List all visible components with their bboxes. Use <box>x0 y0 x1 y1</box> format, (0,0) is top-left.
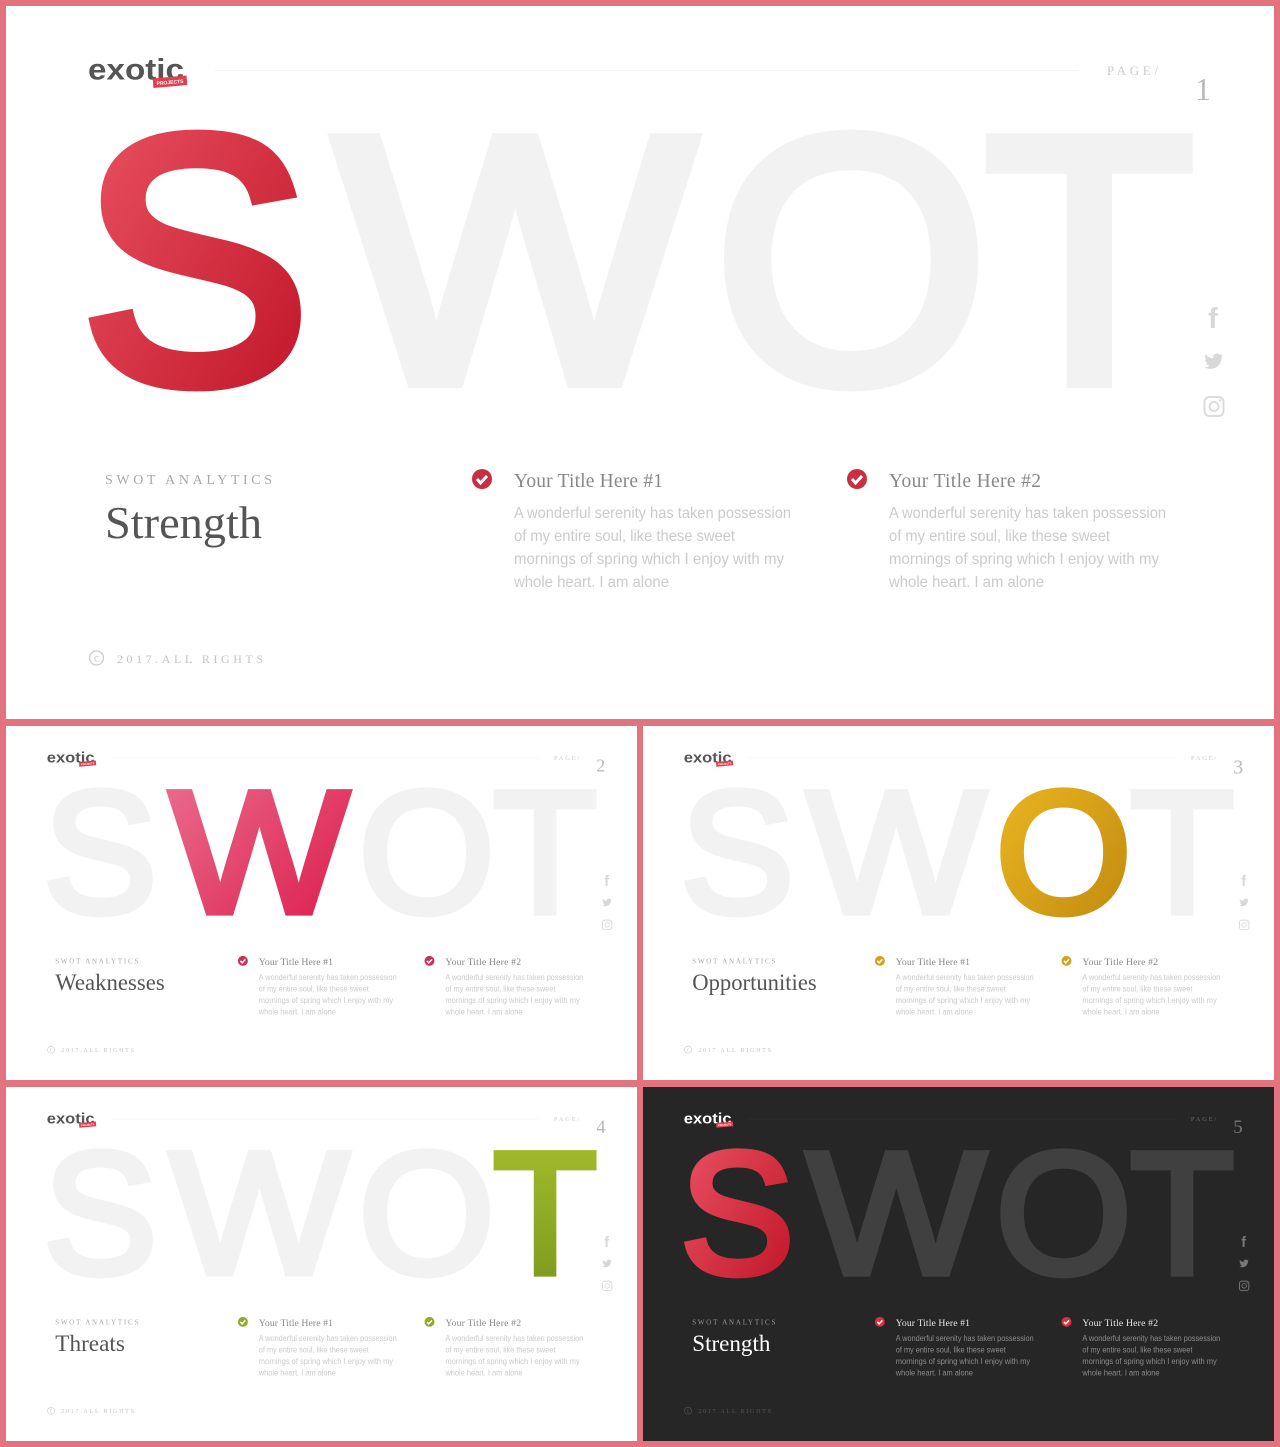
point 1: of my entire soul, like these sweet <box>259 985 370 994</box>
copyright: 2017.ALL RIGHTS <box>117 652 263 666</box>
big letter W: W <box>807 756 985 949</box>
page label: PAGE/ <box>1191 755 1216 762</box>
point 2: Your Title Here #2 <box>1082 957 1158 968</box>
point 1: of my entire soul, like these sweet <box>896 1346 1007 1355</box>
social icons: f <box>604 1235 609 1251</box>
logo: exotic <box>47 751 95 766</box>
page label: PAGE/ <box>1107 63 1158 78</box>
page label: PAGE/ <box>554 755 579 762</box>
copyright: 2017.ALL RIGHTS <box>698 1409 771 1415</box>
point 1: of my entire soul, like these sweet <box>259 1346 370 1355</box>
point 1 <box>238 956 397 1016</box>
copyright: 2017.ALL RIGHTS <box>61 1409 134 1415</box>
point 2: Your Title Here #2 <box>445 957 521 968</box>
section heading: Weaknesses <box>55 970 165 995</box>
point 2: mornings of spring which I enjoy with my <box>1082 1357 1217 1366</box>
point 1: A wonderful serenity has taken possession <box>896 973 1034 982</box>
point 2 <box>425 1317 583 1377</box>
point 1 <box>875 1317 1034 1377</box>
point 2: A wonderful serenity has taken possession <box>889 505 1166 522</box>
point 1: mornings of spring which I enjoy with my <box>896 1357 1030 1366</box>
point 2: A wonderful serenity has taken possession <box>445 1334 583 1343</box>
point 2: mornings of spring which I enjoy with my <box>445 996 580 1005</box>
social icons: f <box>1241 1235 1246 1251</box>
point 1: A wonderful serenity has taken possession <box>514 505 791 522</box>
big letter S: S <box>43 756 157 950</box>
section heading: Opportunities <box>692 970 817 995</box>
copyright: 2017.ALL RIGHTS <box>61 1048 134 1054</box>
big letter O: O <box>359 1116 495 1310</box>
copyright: c <box>687 1047 690 1053</box>
section heading: Threats <box>55 1331 125 1356</box>
point 2: A wonderful serenity has taken possession <box>1082 1334 1220 1343</box>
point 2: of my entire soul, like these sweet <box>445 1346 556 1355</box>
point 1: whole heart. I am alone <box>513 574 669 591</box>
logo: PROJECTS <box>718 762 732 766</box>
social icons: f <box>1241 874 1246 890</box>
section heading: SWOT ANALYTICS <box>55 1318 139 1326</box>
social icons: f <box>1208 303 1218 335</box>
point 1: Your Title Here #1 <box>259 1318 333 1329</box>
point 1 <box>472 469 791 591</box>
big letter O: O <box>359 755 495 949</box>
big letter T: T <box>493 1116 597 1311</box>
page number: 4 <box>596 1117 606 1138</box>
big letter W: W <box>336 65 698 456</box>
point 1: A wonderful serenity has taken possession <box>259 973 397 982</box>
big letter W: W <box>807 1117 985 1310</box>
copyright <box>48 1046 134 1054</box>
point 2: A wonderful serenity has taken possession <box>445 973 583 982</box>
page number: 5 <box>1233 1117 1243 1138</box>
social icons: f <box>604 874 609 890</box>
section heading: SWOT ANALYTICS <box>692 957 776 965</box>
slide 5: Strength dark <box>643 1087 1274 1441</box>
point 2: whole heart. I am alone <box>1081 1368 1160 1377</box>
section heading: SWOT ANALYTICS <box>105 473 272 488</box>
section heading <box>55 1318 139 1356</box>
big letter S: S <box>680 1117 794 1311</box>
point 2: whole heart. I am alone <box>888 574 1044 591</box>
point 1: Your Title Here #1 <box>259 957 333 968</box>
point 2: A wonderful serenity has taken possession <box>1082 973 1220 982</box>
point 2: of my entire soul, like these sweet <box>889 528 1111 545</box>
big letter W: W <box>170 1117 348 1310</box>
point 1: whole heart. I am alone <box>258 1368 336 1377</box>
point 2: Your Title Here #2 <box>445 1318 521 1329</box>
logo: PROJECTS <box>156 79 184 87</box>
page number: 2 <box>596 756 605 776</box>
page label: PAGE/ <box>554 1116 579 1123</box>
point 1: mornings of spring which I enjoy with my <box>259 996 393 1005</box>
point 2 <box>425 956 583 1016</box>
point 1: mornings of spring which I enjoy with my <box>514 551 784 568</box>
copyright: c <box>94 650 99 664</box>
point 2: Your Title Here #2 <box>889 471 1041 492</box>
section heading <box>55 957 165 995</box>
point 1: Your Title Here #1 <box>896 957 970 968</box>
section heading: Strength <box>692 1331 771 1356</box>
logo: exotic <box>47 1112 95 1127</box>
point 1 <box>238 1317 397 1377</box>
logo: exotic <box>684 1112 732 1127</box>
slide 4: Threats <box>6 1087 637 1441</box>
section heading: SWOT ANALYTICS <box>55 957 139 965</box>
slide 1: Strength <box>6 6 1274 719</box>
big letter T: T <box>985 65 1194 456</box>
copyright: 2017.ALL RIGHTS <box>698 1048 771 1054</box>
point 1: Your Title Here #1 <box>896 1318 970 1329</box>
big letter T: T <box>1130 755 1234 950</box>
section heading <box>692 957 817 995</box>
big letter O: O <box>996 755 1132 949</box>
point 2: whole heart. I am alone <box>444 1368 523 1377</box>
point 2: mornings of spring which I enjoy with my <box>889 551 1159 568</box>
point 2: mornings of spring which I enjoy with my <box>445 1357 580 1366</box>
point 2: mornings of spring which I enjoy with my <box>1082 996 1217 1005</box>
point 2: whole heart. I am alone <box>444 1007 523 1016</box>
logo: PROJECTS <box>81 762 95 766</box>
point 1: A wonderful serenity has taken possession <box>259 1334 397 1343</box>
logo: PROJECTS <box>81 1123 95 1127</box>
slide 2: Weaknesses <box>6 726 637 1080</box>
copyright <box>685 1407 771 1415</box>
copyright: c <box>50 1047 53 1053</box>
page label: PAGE/ <box>1191 1116 1216 1123</box>
big letter O: O <box>714 65 988 456</box>
point 2: of my entire soul, like these sweet <box>1082 1346 1193 1355</box>
page number: 3 <box>1233 757 1243 779</box>
big letter T: T <box>1130 1116 1234 1311</box>
big letter W: W <box>170 756 348 949</box>
point 2: Your Title Here #2 <box>1082 1318 1158 1329</box>
big letter S: S <box>43 1117 157 1311</box>
logo: exotic <box>88 54 184 86</box>
big letter S: S <box>680 756 794 950</box>
point 1: whole heart. I am alone <box>895 1368 973 1377</box>
point 1: whole heart. I am alone <box>258 1007 336 1016</box>
page number: 1 <box>1195 71 1211 107</box>
point 1: of my entire soul, like these sweet <box>896 985 1007 994</box>
point 1: A wonderful serenity has taken possession <box>896 1334 1034 1343</box>
point 2: of my entire soul, like these sweet <box>445 985 556 994</box>
copyright <box>685 1046 771 1054</box>
section heading <box>692 1318 776 1356</box>
point 2 <box>1062 1317 1220 1377</box>
point 2: of my entire soul, like these sweet <box>1082 985 1193 994</box>
big letter T: T <box>493 755 597 950</box>
big letter S: S <box>81 65 310 456</box>
social icons <box>602 1235 612 1291</box>
point 1: mornings of spring which I enjoy with my <box>259 1357 393 1366</box>
section heading: SWOT ANALYTICS <box>692 1318 776 1326</box>
social icons <box>602 874 612 930</box>
copyright: c <box>687 1408 690 1414</box>
copyright <box>48 1407 134 1415</box>
point 2 <box>847 469 1166 591</box>
social icons <box>1204 303 1224 416</box>
point 1 <box>875 956 1034 1016</box>
point 1: whole heart. I am alone <box>895 1007 973 1016</box>
point 1: mornings of spring which I enjoy with my <box>896 996 1030 1005</box>
section heading <box>105 473 272 548</box>
social icons <box>1239 1235 1249 1291</box>
point 1: Your Title Here #1 <box>514 471 663 492</box>
point 2: whole heart. I am alone <box>1081 1007 1160 1016</box>
slide 3: Opportunities <box>643 726 1274 1080</box>
copyright: c <box>50 1408 53 1414</box>
social icons <box>1239 874 1249 930</box>
logo: exotic <box>684 751 732 766</box>
point 1: of my entire soul, like these sweet <box>514 528 736 545</box>
logo: PROJECTS <box>718 1123 732 1127</box>
point 2 <box>1062 956 1220 1016</box>
big letter O: O <box>996 1116 1132 1310</box>
section heading: Strength <box>105 497 262 548</box>
